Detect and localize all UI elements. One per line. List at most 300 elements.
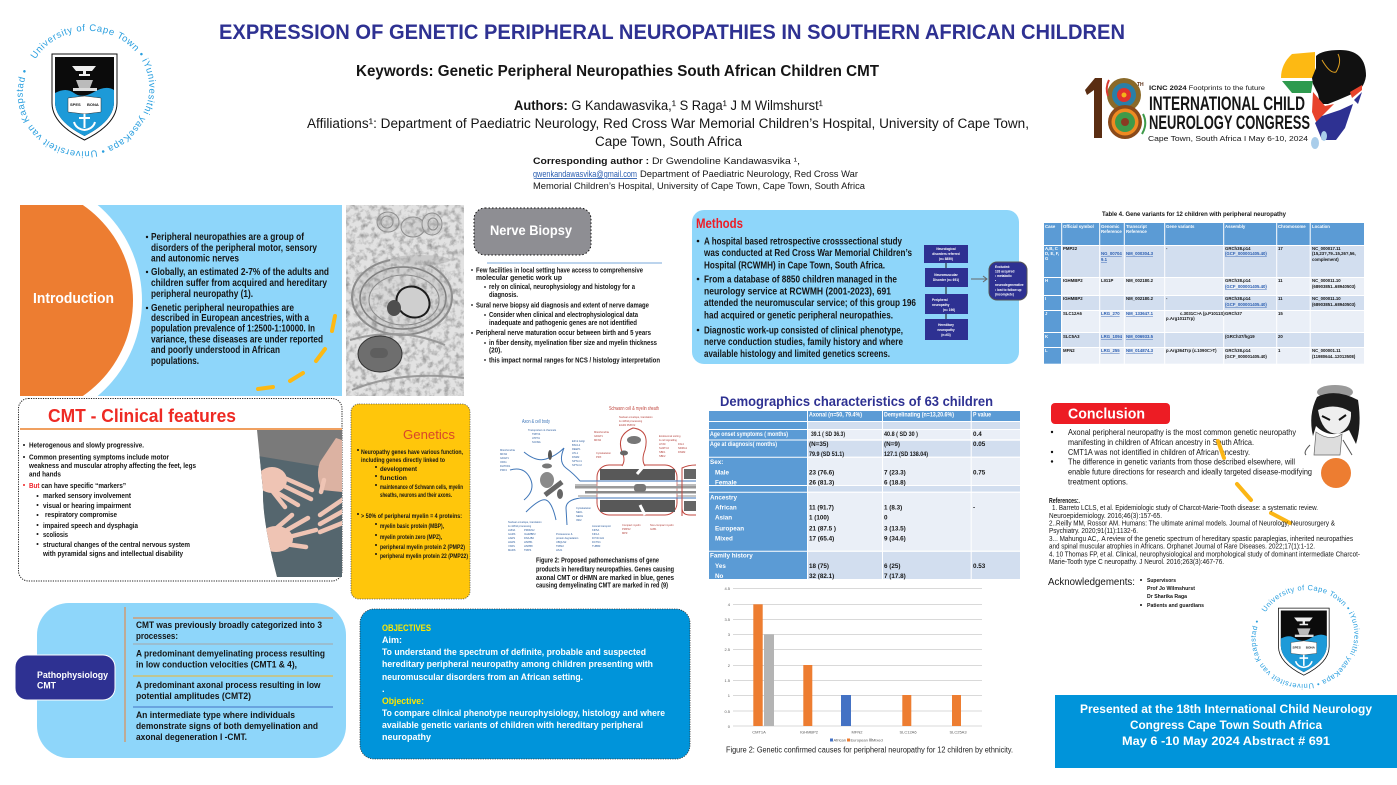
corresponding author: Department of Paediatric Neurology, Red Cross War xyxy=(640,169,858,179)
text block: nerve biopsy bullets: rely on clinical, neurophysiology and histology for a xyxy=(489,282,636,291)
table: demographics: 11 (91.7) xyxy=(809,504,834,512)
table: gene variants: 9.1 xyxy=(1101,257,1108,262)
diagram: pathomechanisms of gene products: Cytoskeleton xyxy=(576,506,592,510)
text block: clinical feature bullets: and hands xyxy=(29,470,61,478)
flow chart: patient selection xyxy=(924,245,1027,340)
table: gene variants: H xyxy=(1045,278,1048,283)
diagram: pathomechanisms of gene products: TRPV4 xyxy=(532,432,541,436)
diagram: pathomechanisms of gene products: Mitochondria xyxy=(500,448,515,452)
table: gene variants: NM_002180.2 xyxy=(1126,278,1154,283)
diagram: pathomechanisms of gene products: PDK3 xyxy=(500,468,507,472)
diagram: pathomechanisms of gene products: UBQLN2 xyxy=(556,540,567,544)
table: demographics: European xyxy=(715,526,744,532)
diagram: pathomechanisms of gene products: DHTKD1 xyxy=(500,464,511,468)
diagram: pathomechanisms of gene products: Mitochondria xyxy=(594,430,609,434)
references: and spinal muscular atrophies in Africans. Orphanet Journal of Rare Diseases. 2022;17(1):1-12. xyxy=(1049,544,1315,550)
table: demographics: P value xyxy=(973,412,991,418)
text block: methods bullets: Hospital (RCWMH) in Cape Town, South Africa. xyxy=(704,260,885,272)
flow chart: patient selection: (n= 8850) xyxy=(939,257,953,261)
diagram: pathomechanisms of gene products: Schwann cell & myelin sheath xyxy=(609,406,659,412)
table: gene variants xyxy=(1044,211,1364,364)
table: demographics: - xyxy=(973,504,975,512)
table: gene variants: SLC5A3 xyxy=(1063,334,1080,339)
table: gene variants: I xyxy=(1045,296,1046,301)
table: gene variants: J xyxy=(1045,311,1048,316)
diagram: pathomechanisms of gene products: SBF1 xyxy=(659,450,666,454)
table: demographics xyxy=(709,411,1020,580)
diagram: pathomechanisms of gene products: Non-compact myelin xyxy=(650,523,674,527)
text block: CMT processes: demonstrate signs of both demyelination and xyxy=(136,721,318,731)
table: gene variants: 15 xyxy=(1278,311,1283,316)
text block: nerve biopsy bullets: Consider when clinical and electrophysiological data xyxy=(489,310,639,319)
diagram: pathomechanisms of gene products: ATL1 xyxy=(572,451,579,455)
table: demographics: Age at diagnosis( months) xyxy=(710,441,777,448)
text block: clinical feature bullets: with pyramidal signs and intellectual disability xyxy=(42,549,183,558)
text block: CMT processes: CMT was previously broadly categorized into 3 xyxy=(136,620,322,630)
table: demographics: 0.75 xyxy=(973,470,986,476)
table: demographics: 1 (100) xyxy=(809,514,829,522)
text block: nerve biopsy bullets xyxy=(471,266,660,364)
bar chart: genetic causes by ethnicity: 2 xyxy=(728,663,731,668)
caption: pathomechanisms figure: products in hereditary neuropathies. Genes causing xyxy=(536,564,674,574)
diagram: pathomechanisms of gene products: BSCL2 xyxy=(572,443,581,447)
table: gene variants: - xyxy=(1166,296,1168,301)
photo: nerve micrograph xyxy=(346,205,464,396)
table: demographics: Yes xyxy=(715,563,726,570)
logo: University of Cape Town: BONA xyxy=(87,102,99,107)
table: gene variants: 11 xyxy=(1278,278,1283,283)
panel: objectives: available genetic variants of children with hereditary peripheral xyxy=(382,720,643,730)
table: gene variants: NM_002180.2 xyxy=(1126,296,1154,301)
authors and affiliations xyxy=(307,98,1029,149)
diagram: pathomechanisms of gene products: GARS xyxy=(508,532,516,536)
table: demographics: Female xyxy=(715,480,737,486)
references xyxy=(1049,498,1361,566)
diagram: pathomechanisms of gene products: & cell signalling xyxy=(659,438,677,442)
text block: CMT processes: A predominant axonal process resulting in low xyxy=(136,680,321,690)
table: demographics: Family history xyxy=(710,552,753,560)
diagram: pathomechanisms of gene products: SPTLC1 xyxy=(572,459,582,463)
keywords: Keywords: Genetic Peripheral Neuropathies South African Children CMT xyxy=(356,63,880,80)
text block: CMT processes: axonal degeneration I -CMT. xyxy=(136,732,247,742)
table: gene variants: 17 xyxy=(1278,246,1283,251)
text block: genetics bullets: > 50% of peripheral myelin = 4 proteins: xyxy=(361,513,462,520)
heading: nerve biopsy: Nerve Biopsy xyxy=(490,223,572,238)
caption: pathomechanisms figure: causing demyelinating CMT are marked in red (9) xyxy=(536,580,668,590)
diagram: pathomechanisms of gene products: DNM2 xyxy=(572,455,580,459)
diagram: pathomechanisms of gene products: PMP22 xyxy=(622,527,631,531)
bar chart: genetic causes by ethnicity: IGHMBP2 xyxy=(800,730,819,734)
text block: nerve biopsy bullets: this impact normal ranges for NCS / histology interpretation xyxy=(489,356,660,364)
table: gene variants: (GCF_000001405.40) xyxy=(1225,251,1267,256)
table: gene variants: - xyxy=(1166,246,1168,251)
acknowledgements: Prof Jo Wilmshurst xyxy=(1147,586,1195,592)
diagram: pathomechanisms of gene products: EGR2 PMP22 xyxy=(619,423,636,427)
table: demographics: (N=9) xyxy=(884,441,900,448)
diagram: pathomechanisms of gene products: MPZ xyxy=(622,531,628,535)
text block: CMT processes xyxy=(136,620,325,742)
diagram: pathomechanisms of gene products: Proteasome & xyxy=(556,532,573,536)
heading: demographics: Demographics characteristics of 63 children xyxy=(720,394,993,409)
authors and affiliations: Affiliations¹: Department of Paediatric Neurology, Red Cross War Memorial Children’s Hospital, University of Cape Town, xyxy=(307,116,1029,131)
table: demographics: 21 (87.5 ) xyxy=(809,526,836,532)
table: demographics: 23 (76.6) xyxy=(809,470,834,476)
table: gene variants: (GCF_000001405.40) xyxy=(1225,354,1267,359)
text block: introduction bullets: variance, these diseases are under reported xyxy=(151,334,323,346)
diagram: pathomechanisms of gene products: IGHMBP2 xyxy=(524,532,536,536)
logo: University of Cape Town (lower): BONA xyxy=(1306,646,1316,650)
text block: methods bullets: was conducted at Red Cross War Memorial Children’s xyxy=(703,248,912,259)
text block: CMT processes: A predominant demyelinating process resulting xyxy=(136,648,325,658)
table: gene variants: Location xyxy=(1312,224,1330,229)
table: demographics: 0.53 xyxy=(973,563,986,570)
text block: clinical feature bullets xyxy=(23,440,196,558)
table: demographics: Ancestry xyxy=(710,494,737,502)
text block: nerve biopsy bullets: (20). xyxy=(489,346,502,354)
table: demographics: 26 (81.3) xyxy=(809,480,834,486)
text block: methods bullets: nerve conduction studies, family history and where xyxy=(704,337,903,348)
diagram: pathomechanisms of gene products: Cytoskeleton xyxy=(596,451,612,455)
table: gene variants: (68903851..68940503) xyxy=(1312,284,1356,289)
table: gene variants: LRG_255 xyxy=(1101,348,1120,353)
acknowledgements: Patients and guardians xyxy=(1147,603,1204,609)
text block: conclusion bullets: CMT1A was not identified in children of African ancestry. xyxy=(1068,447,1250,457)
table: gene variants: Chromosome xyxy=(1278,224,1306,229)
decoration: orange circle xyxy=(1321,458,1351,488)
text block: introduction bullets: described in European ancestries, with a xyxy=(151,313,309,324)
chart legend: African xyxy=(834,738,846,742)
text block: genetics bullets: maintenance of Schwann cells, myelin xyxy=(380,484,463,491)
diagram: pathomechanisms of gene products: TRIM2 xyxy=(556,544,564,548)
text block: methods bullets xyxy=(697,236,916,360)
text block: introduction bullets: peripheral neuropathy (1). xyxy=(151,289,253,300)
table: gene variants: 1 xyxy=(1278,348,1281,353)
bar chart: genetic causes by ethnicity: 1.5 xyxy=(724,678,731,683)
text block: genetics bullets: myelin protein zero (MPZ), xyxy=(380,534,442,541)
diagram: pathomechanisms of gene products: Axonal transport xyxy=(592,524,611,528)
panel: objectives: neuromuscular disorders from an African setting. xyxy=(382,672,583,682)
diagram: pathomechanisms of gene products: TRIP4 xyxy=(524,548,532,552)
diagram: pathomechanisms of gene products: SPTLC2 xyxy=(572,463,582,467)
table: gene variants: (11980644..12013508) xyxy=(1312,354,1356,359)
text block: nerve biopsy bullets: Few facilities in local setting have access to comprehensive xyxy=(476,266,643,274)
diagram: pathomechanisms of gene products: SCN9A xyxy=(532,440,541,444)
diagram: pathomechanisms of gene products: HSPB8 xyxy=(524,544,533,548)
text block: nerve biopsy bullets: Peripheral nerve maturation occur between birth and 5 years xyxy=(476,328,651,337)
diagram: pathomechanisms of gene products: REEP1 xyxy=(572,447,581,451)
text block: conclusion bullets: Axonal peripheral neuropathy is the most common genetic neuropathy xyxy=(1068,427,1297,437)
logo: International Child Neurology Congress: TH xyxy=(1137,82,1144,88)
table: gene variants: Official symbol xyxy=(1063,224,1094,229)
bar chart: genetic causes by ethnicity: 4 xyxy=(728,602,731,607)
diagram: pathomechanisms of gene products: LITAF xyxy=(659,442,666,446)
table: gene variants: (68903851..68940503) xyxy=(1312,302,1356,307)
bar chart: genetic causes by ethnicity: 3.5 xyxy=(724,617,731,622)
text block: conclusion bullets: The difference in genetic variants from those described elsewhere, will xyxy=(1068,456,1295,466)
text block: methods bullets: From a database of 8850 children managed in the xyxy=(704,274,897,286)
heading: methods: Methods xyxy=(696,216,743,231)
decorative yellow dashes: conclusion xyxy=(1218,441,1290,523)
text block: genetics bullets: function xyxy=(380,475,407,482)
references: Neuroepidemiology. 2016;46(3):157-65. xyxy=(1049,513,1162,520)
table: gene variants: Assembly xyxy=(1225,224,1246,229)
diagram: pathomechanisms of gene products: Nuclear envelope, translation xyxy=(619,415,653,419)
text block: introduction bullets: and poorly understood in African xyxy=(151,345,280,356)
text block: methods bullets: attended the neuromuscular service; of this group 196 xyxy=(704,298,916,309)
table: demographics: Mixed xyxy=(715,536,733,542)
text block: genetics bullets: development xyxy=(380,466,418,473)
flow chart: patient selection: Disorder (n= 691) xyxy=(933,278,959,282)
text block: clinical feature bullets: scoliosis xyxy=(43,530,68,539)
diagram: pathomechanisms of gene products: & mRNA processing xyxy=(619,419,643,423)
caption: pathomechanisms figure xyxy=(536,556,674,590)
diagram: pathomechanisms of gene products: INF2 xyxy=(576,518,582,522)
diagram: pathomechanisms of gene products: MARS xyxy=(508,548,516,552)
table: gene variants: Genomic xyxy=(1101,224,1120,229)
heading: conclusion xyxy=(1051,403,1170,424)
corresponding author: Memorial Children’s Hospital, University of Cape Town, Cape Town, South Africa xyxy=(533,181,865,191)
exclusion box: (incomplete) xyxy=(995,292,1014,296)
bar chart: genetic causes by ethnicity xyxy=(724,586,982,742)
table: gene variants: NG_00704 xyxy=(1101,251,1122,256)
table: gene variants: PMP22 xyxy=(1063,246,1078,251)
panel: objectives: To compare clinical phenotype neurophysiology, histology and where xyxy=(382,708,665,718)
table: demographics: Axonal (n=50, 79.4%) xyxy=(809,412,862,418)
panel: objectives: hereditary peripheral neuropathy among children presenting with xyxy=(382,659,653,669)
diagram: pathomechanisms of gene products: DCTN1 xyxy=(592,540,601,544)
label: pathophysiology CMT xyxy=(15,655,115,700)
table: demographics: 127.1 (SD 138.04) xyxy=(884,451,928,458)
diagram: pathomechanisms of gene products: YARS xyxy=(508,544,515,548)
table: demographics: No xyxy=(715,573,724,580)
table: demographics: 0.05 xyxy=(973,441,986,448)
text block: clinical feature bullets: Heterogenous and slowly progressive. xyxy=(29,440,144,450)
diagram: pathomechanisms of gene products: PRX xyxy=(596,455,602,459)
text block: nerve biopsy bullets: molecular genetic work up xyxy=(476,273,562,282)
flow chart: patient selection: Neuromuscular xyxy=(934,273,958,277)
table: gene variants: GRCh38.p14 xyxy=(1225,246,1251,251)
exclusion box: • xyxy=(995,278,997,282)
table: gene variants: K xyxy=(1045,334,1049,339)
table: demographics: Age onset symptoms ( months) xyxy=(710,431,788,438)
acknowledgements: Supervisors xyxy=(1147,578,1176,584)
table: gene variants: complement) xyxy=(1312,257,1339,262)
text block: introduction bullets: Globally, an estimated 2-7% of the adults and xyxy=(151,267,329,278)
bar chart: genetic causes by ethnicity: 2.5 xyxy=(724,647,731,652)
logo: University of Cape Town: University of Cape Town • iYunivesithi yaseKapa • Universiteit van Kaapstad • xyxy=(16,24,156,158)
flow chart: patient selection: neuropathy xyxy=(932,303,950,307)
text block: clinical feature bullets: structural changes of the central nervous system xyxy=(43,540,190,549)
table: gene variants: (GCF_000001405.40) xyxy=(1225,302,1267,307)
text block: conclusion bullets: treatment options. xyxy=(1068,476,1128,486)
table: gene variants: G xyxy=(1045,256,1049,261)
exclusion box: 133 acquired xyxy=(995,270,1015,274)
acknowledgements xyxy=(1048,576,1204,609)
flow chart: patient selection: Neurological xyxy=(936,247,956,251)
diagram: pathomechanisms of gene products: HSJ1 xyxy=(556,548,563,552)
table: demographics: 6 (18.8) xyxy=(884,480,906,486)
logo: University of Cape Town (lower): SPES xyxy=(1293,646,1301,650)
table: gene variants: GRCh38.p14 xyxy=(1225,278,1251,283)
table: demographics: 6 (25) xyxy=(884,563,900,570)
text block: genetics bullets: sheaths, neurons and their axons. xyxy=(380,492,452,499)
heading: CMT clinical features: CMT - Clinical features xyxy=(48,406,236,426)
table: gene variants: NM_000304.3 xyxy=(1126,251,1154,256)
bar chart: genetic causes by ethnicity: 1 xyxy=(728,693,731,698)
panel: CMT clinical features xyxy=(18,398,345,581)
photo: hands xyxy=(257,430,345,577)
diagram: pathomechanisms of gene products: protein degradation xyxy=(556,536,579,540)
bar chart: genetic causes by ethnicity: 3 xyxy=(728,632,731,637)
exclusion box: • lost to follow up xyxy=(995,288,1021,292)
text block: genetics bullets: Neuropathy genes have various function, xyxy=(361,449,463,456)
text block: genetics bullets: including genes directly linked to xyxy=(361,457,445,464)
table: gene variants: p.Arg364Trp (c.1090C>T) xyxy=(1166,348,1217,353)
authors and affiliations: Authors: G Kandawasvika,¹ S Raga¹ J M Wilmshurst¹ xyxy=(514,98,823,113)
corresponding author: Corresponding author : Dr Gwendoline Kandawasvika ¹, xyxy=(533,156,800,166)
panel: objectives: Objective: xyxy=(382,696,424,706)
text block: methods bullets: A hospital based retrospective crosssectional study xyxy=(704,236,902,248)
diagram: pathomechanisms of gene products: Nuclear envelope, translation xyxy=(508,520,542,524)
table: gene variants: Case xyxy=(1045,224,1056,229)
diagram: pathomechanisms of gene products: KIF1A xyxy=(592,532,599,536)
caption: pathomechanisms figure: axonal CMT or dHMN are marked in blue, genes xyxy=(536,573,674,582)
illustration: cartoon girl xyxy=(1305,385,1360,455)
decorative yellow dashes: introduction xyxy=(258,316,335,389)
text block: introduction bullets: Peripheral neuropathies are a group of xyxy=(151,232,305,243)
text block: conclusion bullets: manifesting in children of African ancestry in South Africa. xyxy=(1068,437,1254,447)
text block: introduction bullets: population prevalence of 1:2500-1:10000. In xyxy=(151,324,315,334)
logo: International Child Neurology Congress: ICNC 2024 Footprints to the future xyxy=(1149,85,1265,92)
table: gene variants: LIG1P xyxy=(1101,278,1114,283)
diagram: pathomechanisms of gene products: TUBB3 xyxy=(592,544,601,548)
table title: Table 4. Gene variants for 12 children with peripheral neuropathy xyxy=(1102,211,1286,218)
bar chart: genetic causes by ethnicity: 0 xyxy=(728,724,731,729)
table: demographics: 9 (34.6) xyxy=(884,536,906,542)
text block: CMT processes: potential amplitudes (CMT2) xyxy=(136,691,251,701)
table: demographics: 79.9 (SD 51.1) xyxy=(809,451,844,458)
label: pathophysiology CMT: CMT xyxy=(37,680,56,690)
chart legend xyxy=(830,738,883,742)
diagram: pathomechanisms of gene products: NDRG1 xyxy=(678,446,688,450)
table: gene variants: NC_000017.11 xyxy=(1312,246,1341,251)
diagram: pathomechanisms of gene products: ER & Golgi xyxy=(572,439,585,443)
table: gene variants: NM_006933.5 xyxy=(1126,334,1154,339)
text block: introduction bullets: children suffer from acquired and hereditary xyxy=(151,278,327,289)
bar chart: genetic causes by ethnicity: MFN2 xyxy=(852,730,863,734)
table: demographics: Demyelinating (n=13,20.6%) xyxy=(884,412,954,418)
table: demographics: 7 (23.3) xyxy=(884,470,906,476)
text block: genetics bullets: myelin basic protein (MBP), xyxy=(380,523,444,530)
table: gene variants: LRG_1094 xyxy=(1101,334,1123,339)
text block: methods bullets: Diagnostic work-up consisted of clinical phenotype, xyxy=(704,326,903,336)
diagram: pathomechanisms of gene products: GJB1 xyxy=(650,527,657,531)
banner: presented at congress: May 6 -10 May 2024 Abstract # 691 xyxy=(1122,736,1331,748)
title: EXPRESSION OF GENETIC PERIPHERAL NEUROPATHIES IN SOUTHERN AFRICAN CHILDREN xyxy=(219,21,1125,44)
diagram: pathomechanisms of gene products: HSPB1 xyxy=(524,540,533,544)
text block: clinical feature bullets: visual or hearing impairment xyxy=(43,501,132,510)
panel: objectives xyxy=(360,609,690,759)
table: gene variants: Reference xyxy=(1126,229,1147,234)
text block: conclusion bullets: enable future directions for research and ideally targeted disease-modifying xyxy=(1068,466,1312,476)
text block: nerve biopsy bullets: inadequate and pathogenic genes are not identified xyxy=(489,318,637,327)
bar chart: genetic causes by ethnicity: SLC25A3 xyxy=(949,730,967,734)
heading: genetics: Genetics xyxy=(403,428,455,442)
table: gene variants: GRCh38.p14 xyxy=(1225,348,1251,353)
flow chart: patient selection: (n=63) xyxy=(941,333,951,337)
panel: genetics xyxy=(351,404,470,599)
diagram: pathomechanisms of gene products: KIF5A xyxy=(592,528,599,532)
diagram: pathomechanisms of gene products: DNAJB2 xyxy=(524,536,535,540)
logo: International Child Neurology Congress: Cape Town, South Africa I May 6-10, 2024 xyxy=(1148,134,1308,143)
bar chart: genetic causes by ethnicity: 4.5 xyxy=(724,586,731,591)
text block: genetics bullets: peripheral myelin protein 22 (PMP22) xyxy=(380,553,468,560)
diagram: pathomechanisms of gene products: FIG4 xyxy=(678,442,684,446)
table: demographics: 18 (75) xyxy=(809,563,829,570)
table: gene variants: 11 xyxy=(1278,296,1283,301)
logo: International Child Neurology Congress: INTERNATIONAL CHILD xyxy=(1149,94,1305,115)
logo: University of Cape Town (lower): University of Cape Town • iYunivesithi yaseKapa • Universiteit van Kaapstad • xyxy=(1250,584,1360,690)
table: demographics: 40.8 ( SD 30 ) xyxy=(884,431,918,438)
bar chart: genetic causes by ethnicity: CMT1A xyxy=(752,730,766,734)
table: gene variants: c.3031C>A (p.P1011S) xyxy=(1180,311,1225,316)
heading: nerve biopsy xyxy=(474,208,591,255)
logo: International Child Neurology Congress xyxy=(1085,50,1366,149)
diagram: pathomechanisms of gene products: DNM2 xyxy=(678,450,686,454)
table: gene variants: IGHMBP2 xyxy=(1063,278,1083,283)
panel: methods xyxy=(692,210,1027,364)
panel: objectives: OBJECTIVES xyxy=(382,623,431,633)
table: gene variants: NM_133647.1 xyxy=(1126,311,1154,316)
table: gene variants: A,B, C xyxy=(1045,246,1058,251)
corresponding author: gwenkandawasvika@gmail.com xyxy=(533,169,637,179)
references: Psychiatry. 2020;91(11):1132-6. xyxy=(1049,528,1138,535)
table: demographics: 7 (17.8) xyxy=(884,573,906,580)
flow chart: patient selection: neuropathy xyxy=(937,328,955,332)
table: gene variants: D, E, F, xyxy=(1045,251,1059,256)
table: gene variants: L xyxy=(1045,348,1048,353)
table: demographics: 39.1 ( SD 36.3) xyxy=(811,431,845,438)
table: gene variants: MFN2 xyxy=(1063,348,1075,353)
text block: nerve biopsy bullets: in fiber density, myelination fiber size and myelin thickness xyxy=(489,338,657,347)
diagram: pathomechanisms of gene products: GDAP1 xyxy=(594,434,603,438)
diagram: pathomechanisms of gene products: Transporters & channels xyxy=(528,428,557,432)
table: gene variants: LRG_270 xyxy=(1101,311,1120,316)
table: demographics: 3 (13.5) xyxy=(884,526,906,532)
table: demographics: 0.4 xyxy=(973,431,982,438)
flow chart: patient selection: (n= 196) xyxy=(943,308,955,312)
references: 4. 10 Thomas FP, et al. Clinical, neurophysiological and morphological study of dominant intermediate Charcot- xyxy=(1049,552,1361,558)
bar chart: genetic causes by ethnicity: 0.5 xyxy=(724,709,731,714)
logo: International Child Neurology Congress: NEUROLOGY CONGRESS xyxy=(1149,113,1310,134)
table: gene variants: GRCh38.p14 xyxy=(1225,296,1251,301)
diagram: pathomechanisms of gene products: Endosomal sorting xyxy=(659,434,681,438)
table: gene variants: p.Arg1011Trp) xyxy=(1166,316,1195,321)
flow chart: patient selection: Peripheral xyxy=(932,298,948,302)
heading: conclusion: Conclusion xyxy=(1068,406,1145,422)
text block: clinical feature bullets: weakness and muscular atrophy affecting the feet, legs xyxy=(28,461,196,470)
text block: CMT processes: in low conduction velocities (CMT1 & 4), xyxy=(136,660,297,670)
diagram: pathomechanisms of gene products: PRDM12 xyxy=(524,528,535,532)
table: gene variants: NM_014874.3 xyxy=(1126,348,1154,353)
text block: genetics bullets: peripheral myelin protein 2 (PMP2) xyxy=(380,544,465,551)
text block: nerve biopsy bullets: Sural nerve biopsy aid diagnosis and extent of nerve damage xyxy=(476,300,649,310)
panel: nerve biopsy xyxy=(471,208,662,364)
caption: pathomechanisms figure: Figure 2: Proposed pathomechanisms of gene xyxy=(536,556,659,564)
panel: objectives: . xyxy=(382,684,385,694)
text block: introduction bullets: and autonomic nerves xyxy=(151,254,239,264)
text block: introduction bullets: populations. xyxy=(151,356,199,367)
